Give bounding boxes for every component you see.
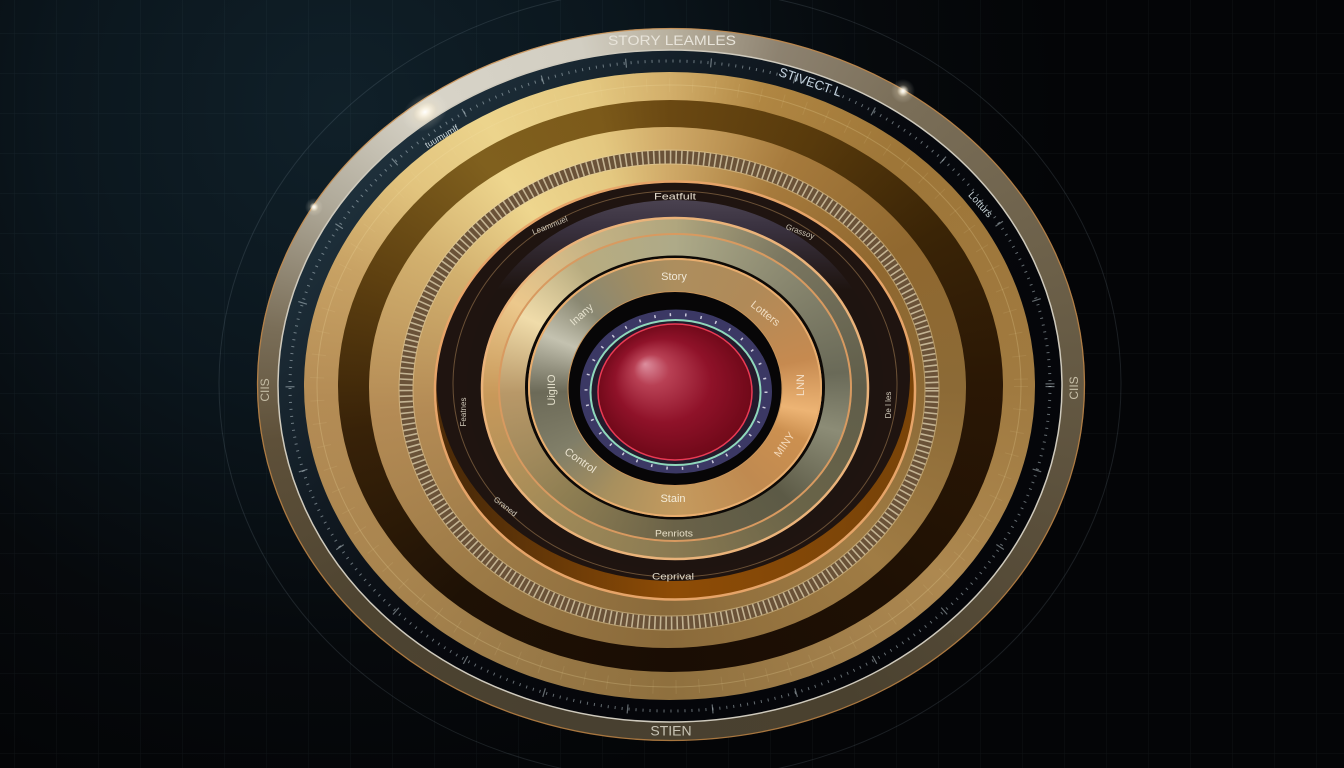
ring: olive bands	[481, 217, 869, 560]
ring label: upper right: Lotters	[748, 299, 782, 329]
ring: dark tick dial	[278, 50, 1062, 722]
channel label: lower left: Graned	[492, 495, 519, 518]
ring: large gold band	[304, 72, 1035, 700]
dial label: objective: STIVECT L	[777, 64, 844, 100]
ring: recessed brown channel	[338, 100, 1003, 672]
ring label: right: LNN	[795, 374, 807, 396]
glint: upper left highlight	[395, 84, 455, 140]
outer label: bottom: STIEN	[650, 723, 692, 739]
outer label: left: CIIS	[258, 378, 272, 402]
core: red dome with instrument rings	[568, 292, 782, 486]
channel label: upper right: Grassoy	[785, 222, 816, 241]
ring label: upper left: Inany	[568, 301, 596, 328]
ring label: lower right: MINY	[772, 430, 798, 460]
ring: dark label channel	[434, 171, 916, 600]
channel label: right: De l les	[884, 392, 893, 418]
core: red dome	[598, 324, 752, 460]
outer label: right: CIIS	[1067, 376, 1081, 400]
tick scale	[399, 150, 939, 630]
glint: small left star	[305, 198, 323, 216]
channel label: left: Featnes	[459, 398, 468, 426]
ring: inner copper label ring	[525, 256, 825, 520]
concentric dial	[257, 28, 1085, 741]
channel label: upper left: Leammuel	[531, 214, 569, 237]
channel label: bottom: Ceprival	[652, 572, 694, 583]
ring: outer metal bezel	[257, 28, 1085, 741]
ring label: bottom: Stain	[660, 493, 686, 505]
channel label: top: Featfult	[654, 192, 696, 203]
ring label: lower left: Control	[562, 446, 598, 476]
glint: upper right star	[891, 79, 915, 103]
ring label: left: UigIIO	[546, 374, 558, 406]
outer label: top: STORY LEAMLES	[608, 32, 736, 48]
dial label: right: Lotturs	[966, 190, 994, 220]
olive label: bottom: Penriots	[655, 529, 693, 540]
ring: gold band with tick scale	[369, 127, 966, 648]
ring label: top: Story	[661, 271, 687, 283]
dial label: upper left: tuumumlf	[423, 123, 461, 150]
